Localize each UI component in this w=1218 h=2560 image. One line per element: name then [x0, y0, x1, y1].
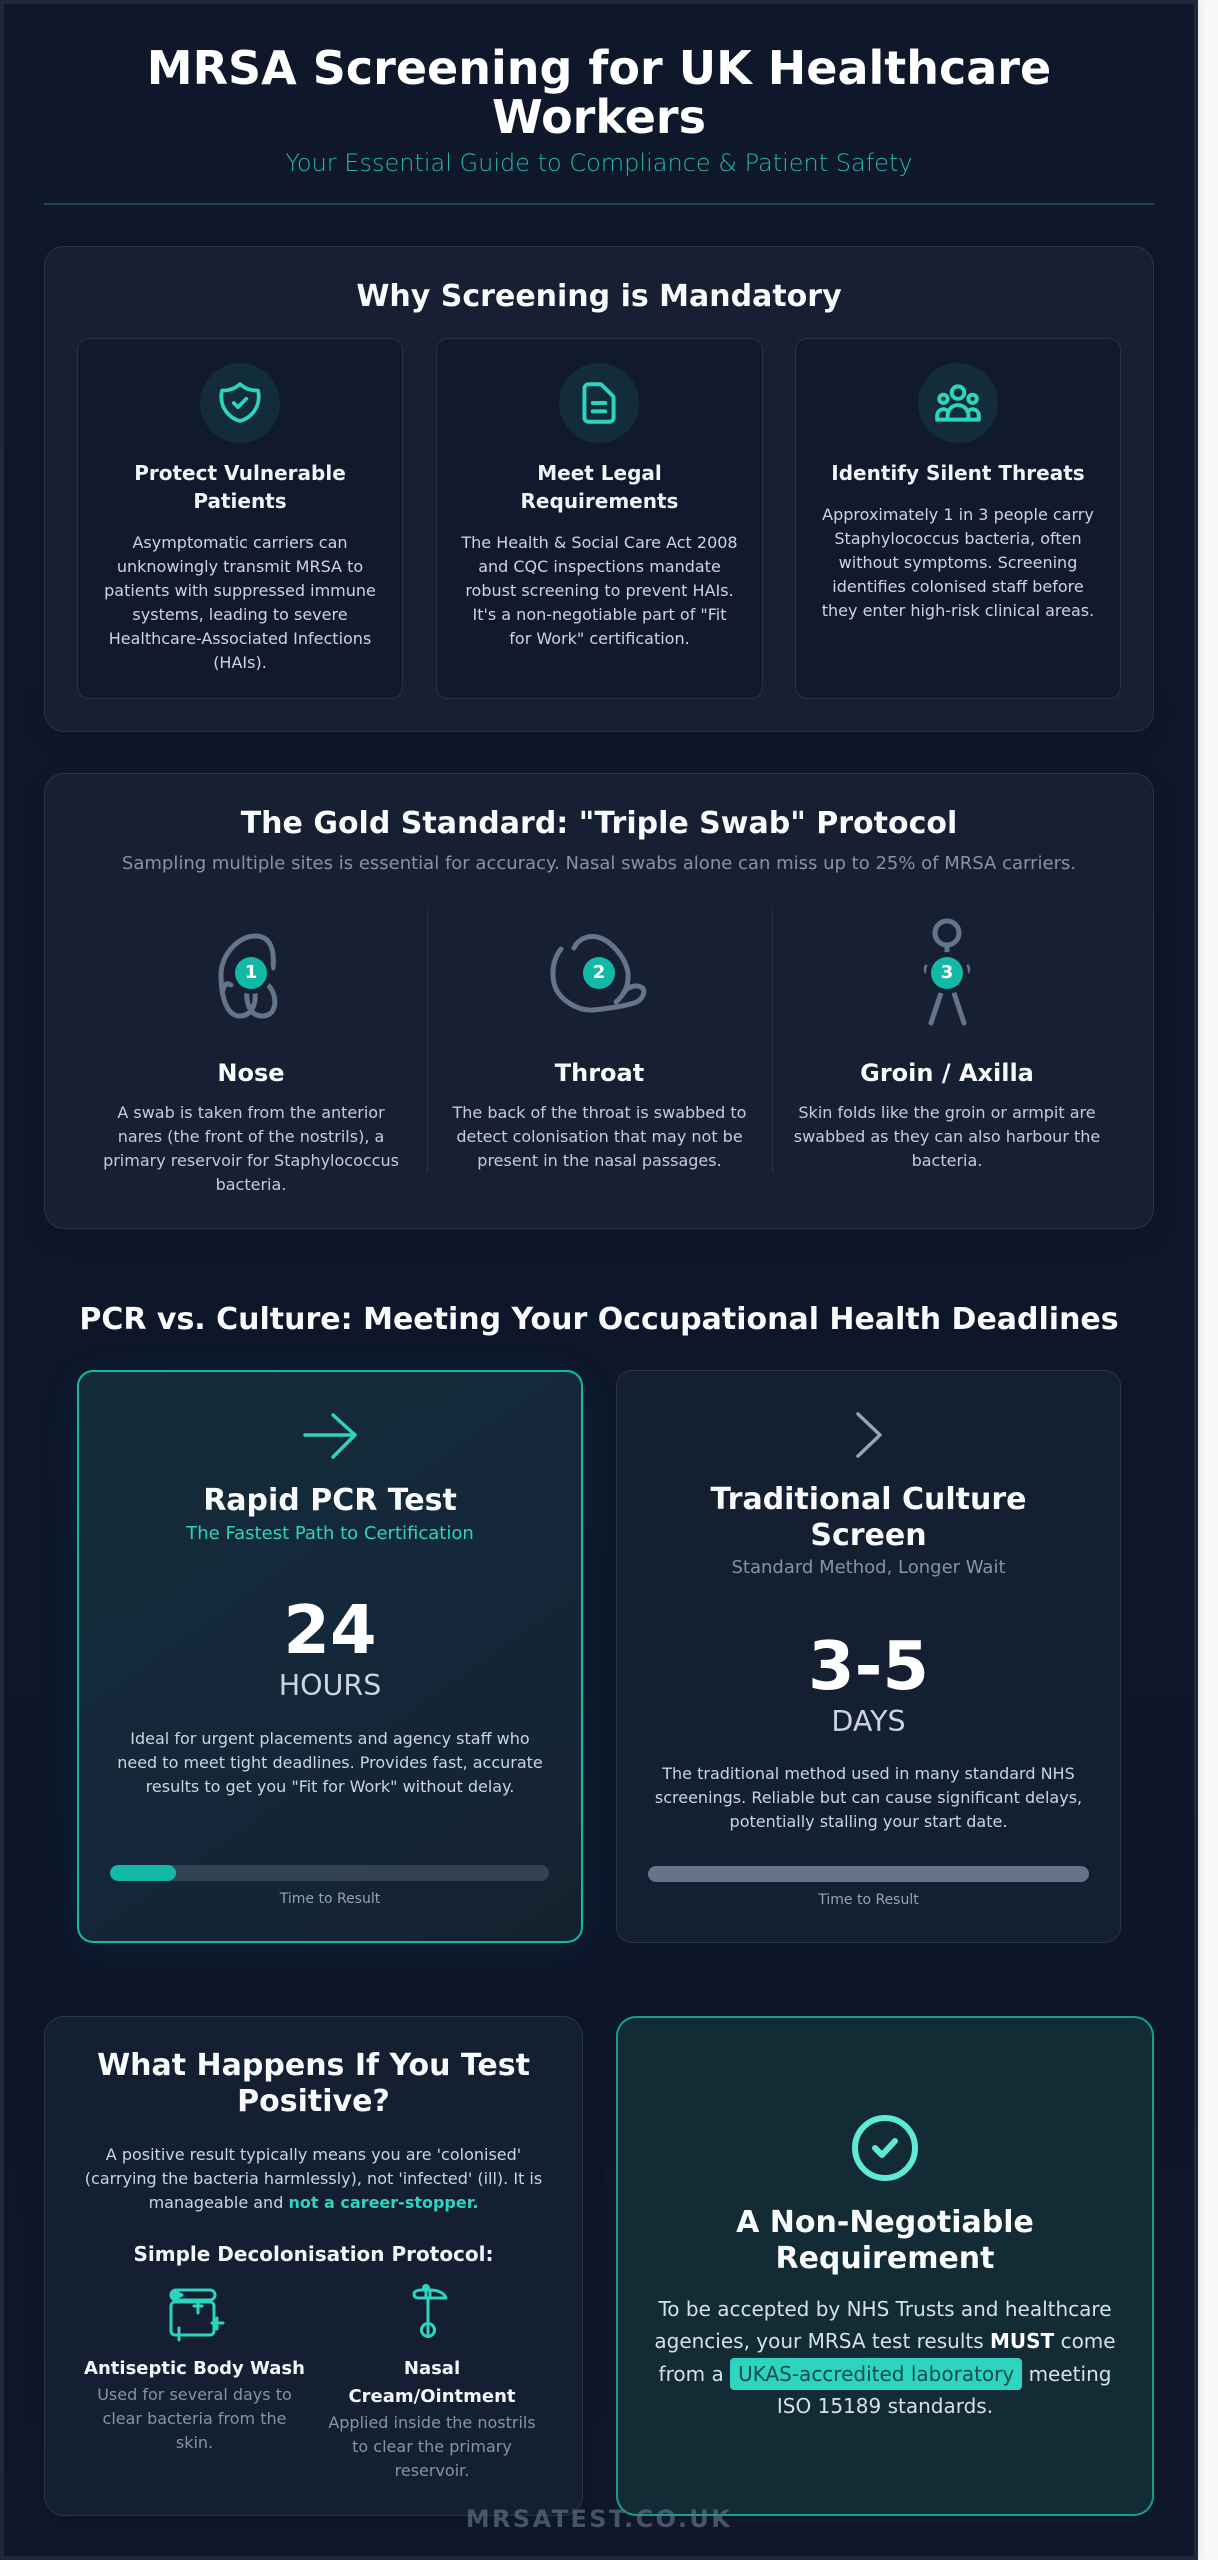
card text: patients with suppressed immune	[104, 581, 376, 600]
card: rapid pcr test	[77, 1370, 583, 1943]
badge 2: 2	[593, 962, 605, 983]
step title: Nose	[217, 1059, 285, 1087]
step title: Throat	[555, 1059, 644, 1087]
heading: Positive?	[237, 2084, 390, 2119]
item text	[97, 2385, 292, 2452]
item: antiseptic body wash	[84, 2288, 305, 2452]
card text: Approximately 1 in 3 people carry	[822, 505, 1094, 524]
stat value: 24	[283, 1591, 377, 1669]
card text	[104, 533, 376, 672]
panel: why screening is mandatory	[44, 246, 1154, 732]
card title: Requirements	[521, 489, 678, 513]
step: nose	[103, 934, 399, 1194]
card text: Staphylococcus bacteria, often	[834, 529, 1082, 548]
panel: non-negotiable requirement	[616, 2016, 1154, 2516]
card text	[655, 1764, 1082, 1831]
item text: reservoir.	[395, 2461, 469, 2480]
item title: Cream/Ointment	[348, 2386, 516, 2407]
card text: robust screening to prevent HAIs.	[465, 581, 734, 600]
heading: A Non-Negotiable	[736, 2205, 1034, 2240]
item title	[348, 2358, 516, 2407]
footer watermark: MRSATEST.CO.UK	[466, 2505, 732, 2533]
card text: potentially stalling your start date.	[730, 1812, 1007, 1831]
step text	[794, 1103, 1100, 1170]
step text: bacteria.	[216, 1175, 286, 1194]
step text: Skin folds like the groin or armpit are	[798, 1103, 1096, 1122]
item text: clear bacteria from the	[103, 2409, 286, 2428]
step text: present in the nasal passages.	[477, 1151, 722, 1170]
stat unit: HOURS	[279, 1669, 381, 1702]
heading: pcr vs culture: PCR vs. Culture: Meeting Your Occupational Health Deadlines	[79, 1302, 1119, 1337]
bar caption: Time to Result	[818, 1892, 919, 1908]
step text: bacteria.	[912, 1151, 982, 1170]
stat unit: DAYS	[831, 1705, 906, 1738]
card text: for Work" certification.	[509, 629, 690, 648]
card text: The Health & Social Care Act 2008	[461, 533, 738, 552]
explanatory text	[85, 2145, 542, 2212]
heading: gold standard: The Gold Standard: "Triple Swab" Protocol	[241, 806, 957, 841]
heading: What Happens If You Test	[97, 2048, 530, 2083]
card title: Traditional Culture	[710, 1482, 1027, 1517]
item: nasal cream	[328, 2284, 536, 2480]
progress bar	[110, 1865, 549, 1881]
card: protect vulnerable patients	[77, 338, 403, 699]
badge 1: 1	[245, 962, 257, 983]
explanatory text: (carrying the bacteria harmlessly), not 'infected' (ill). It is	[85, 2169, 542, 2188]
card: identify silent threats	[795, 338, 1121, 699]
icon: document	[559, 363, 639, 443]
card title: Protect Vulnerable	[134, 461, 346, 485]
card: meet legal requirements	[436, 338, 763, 699]
protocol intro text: Sampling multiple sites is essential for accuracy. Nasal swabs alone can miss up to 25% of MRSA carriers.	[122, 853, 1076, 874]
heading	[97, 2048, 530, 2119]
bar caption: Time to Result	[280, 1891, 380, 1907]
card subtitle: The Fastest Path to Certification	[186, 1523, 474, 1544]
step text: swabbed as they can also harbour the	[794, 1127, 1100, 1146]
icon: arrow	[303, 1413, 357, 1459]
item text: to clear the primary	[352, 2437, 512, 2456]
icon: check circle	[852, 2115, 918, 2181]
requirement text: agencies, your MRSA test results MUST come	[654, 2329, 1116, 2353]
card title: Meet Legal	[537, 461, 662, 485]
heading	[736, 2205, 1034, 2276]
card text: It's a non-negotiable part of "Fit	[472, 605, 727, 624]
card text: screenings. Reliable but can cause significant delays,	[655, 1788, 1082, 1807]
step text: The back of the throat is swabbed to	[453, 1103, 746, 1122]
heading: Requirement	[775, 2241, 994, 2276]
card text: results to get you "Fit for Work" without delay.	[146, 1777, 514, 1796]
card title	[710, 1482, 1027, 1553]
card text: without symptoms. Screening	[839, 553, 1077, 572]
card text: they enter high-risk clinical areas.	[822, 601, 1094, 620]
panel: triple swab protocol	[44, 773, 1154, 1229]
badge 3: 3	[941, 962, 953, 983]
card text: The traditional method used in many standard NHS	[662, 1764, 1075, 1783]
card text: and CQC inspections mandate	[478, 557, 721, 576]
card text: identifies colonised staff before	[832, 577, 1084, 596]
subheading: Simple Decolonisation Protocol:	[133, 2242, 494, 2266]
card title: Identify Silent Threats	[831, 461, 1085, 485]
card text: need to meet tight deadlines. Provides fast, accurate	[117, 1753, 543, 1772]
icon: people group	[918, 363, 998, 443]
heading: why screening: Why Screening is Mandatory	[356, 279, 842, 314]
badge 2	[583, 957, 615, 989]
step text: A swab is taken from the anterior	[117, 1103, 385, 1122]
card subtitle: Standard Method, Longer Wait	[731, 1557, 1006, 1578]
requirement text	[654, 2297, 1116, 2418]
icon: nose	[218, 934, 278, 1018]
icon: throat	[550, 934, 646, 1013]
icon: nasal applicator	[412, 2284, 448, 2338]
step text: primary reservoir for Staphylococcus	[103, 1151, 399, 1170]
badge 1	[235, 957, 267, 989]
card text: (HAIs).	[213, 653, 267, 672]
card text: Asymptomatic carriers can	[132, 533, 348, 552]
item text: skin.	[176, 2433, 213, 2452]
item title: Nasal	[404, 2358, 460, 2379]
panel: what happens if you test positive	[44, 2016, 583, 2516]
item text	[328, 2413, 536, 2480]
explanatory text: manageable and not a career-stopper.	[149, 2193, 478, 2212]
card title: Patients	[193, 489, 287, 513]
step text: detect colonisation that may not be	[456, 1127, 743, 1146]
item text: Used for several days to	[97, 2385, 292, 2404]
stat: 24 hours	[279, 1591, 381, 1702]
title: Workers	[492, 90, 706, 144]
card: traditional culture screen	[616, 1370, 1121, 1943]
card text	[461, 533, 738, 648]
card title: Screen	[810, 1518, 927, 1553]
progress bar	[648, 1866, 1089, 1882]
card title: Rapid PCR Test	[203, 1483, 457, 1518]
card text: systems, leading to severe	[132, 605, 348, 624]
item text: Applied inside the nostrils	[328, 2413, 536, 2432]
card title	[521, 461, 678, 513]
badge 3	[931, 957, 963, 989]
explanatory text: A positive result typically means you are 'colonised'	[106, 2145, 521, 2164]
card text	[822, 505, 1094, 620]
step title: Groin / Axilla	[860, 1059, 1034, 1087]
title: MRSA Screening for UK Healthcare	[147, 41, 1051, 95]
card text	[117, 1729, 543, 1796]
step text	[103, 1103, 399, 1194]
step: throat	[452, 934, 746, 1170]
icon: body wash	[169, 2288, 224, 2342]
requirement text: To be accepted by NHS Trusts and healthcare	[658, 2297, 1112, 2321]
stat: 3-5 days	[808, 1627, 929, 1738]
step: groin axilla	[794, 918, 1100, 1170]
requirement text: from a UKAS-accredited laboratory meeting	[659, 2362, 1111, 2386]
icon: body	[924, 918, 970, 1026]
card text: Healthcare-Associated Infections	[109, 629, 371, 648]
card text: Ideal for urgent placements and agency staff who	[130, 1729, 530, 1748]
title	[147, 41, 1051, 144]
icon: shield check	[200, 363, 280, 443]
step text: nares (the front of the nostrils), a	[118, 1127, 384, 1146]
card text: unknowingly transmit MRSA to	[117, 557, 363, 576]
requirement text: ISO 15189 standards.	[777, 2394, 993, 2418]
icon: chevron	[856, 1412, 882, 1458]
item title: Antiseptic Body Wash	[84, 2358, 305, 2379]
step text	[452, 1103, 746, 1170]
card title	[134, 461, 346, 513]
stat value: 3-5	[808, 1627, 929, 1705]
subtitle: Your Essential Guide to Compliance & Patient Safety	[285, 149, 913, 177]
